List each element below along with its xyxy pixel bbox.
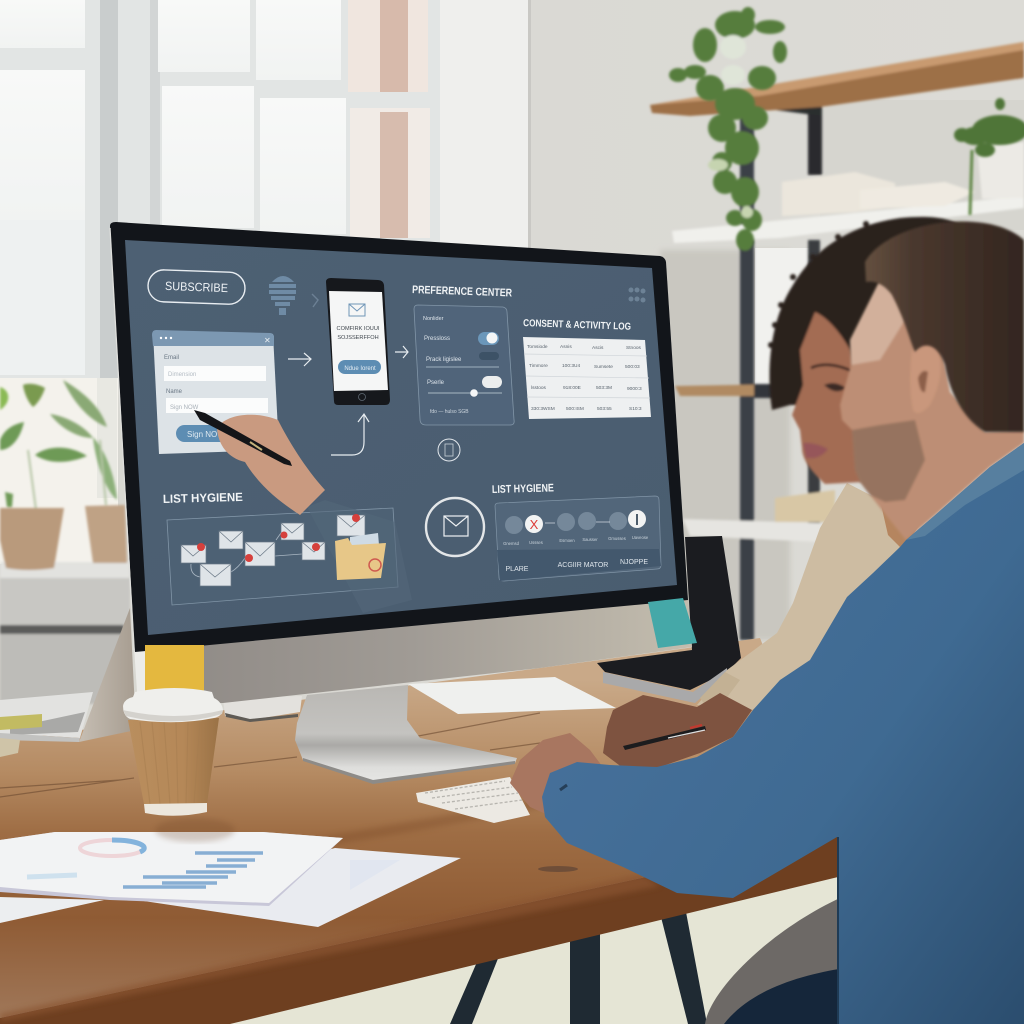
- panel: list hygiene status flow: X: [530, 517, 539, 532]
- screen: sign-up form: Dimension: [168, 372, 196, 378]
- table: activity log: Tomsiode: [527, 344, 548, 350]
- coffee cup: [123, 688, 235, 842]
- panel: list hygiene status flow: Uaveose: [632, 535, 649, 540]
- chair and trousers: [705, 897, 850, 1024]
- table: activity log: Sumsete: [594, 364, 613, 370]
- panel: list hygiene status flow: Sausser: [582, 537, 598, 542]
- table: activity log: 918:00E: [563, 385, 581, 391]
- man: neck and head: [840, 280, 1024, 540]
- hanging plant: [669, 7, 787, 251]
- table: activity log: Stnoos: [626, 345, 642, 351]
- screen: subscribe button: SUBSCRIBE: [165, 279, 228, 295]
- wooden desk: [0, 638, 838, 1018]
- table: activity log: 500:ISM: [566, 406, 584, 412]
- screen: sign-up form: Sign NOW: [170, 405, 199, 411]
- woman: hand with pen: [603, 693, 752, 768]
- table: activity log: S10:3: [629, 406, 642, 412]
- panel: list hygiene status flow: Gnemsd: [503, 541, 520, 546]
- screen: sign-up form: ✕: [264, 336, 271, 345]
- icon: striped bulb: [269, 276, 296, 315]
- screen: subscribe button: [147, 269, 246, 305]
- keyboard: [416, 777, 530, 823]
- potted plants on window sill: [0, 380, 130, 704]
- panel: preference center toggles: [414, 305, 514, 425]
- icon: large envelope circle: [426, 498, 484, 556]
- panel: list hygiene status flow: Ussses: [529, 540, 543, 545]
- laptop at left edge: [0, 608, 136, 757]
- heading: preference center: PREFERENCE CENTER: [412, 284, 512, 299]
- table: activity log: Ascis: [592, 345, 604, 351]
- panel: list hygiene status flow: [495, 496, 661, 581]
- panel: preference center toggles: Nonlider: [423, 316, 444, 322]
- panel: preference center toggles: Pserle: [427, 380, 445, 386]
- man: blue shirt: [542, 443, 1024, 1024]
- heading: consent and activity log: CONSENT & ACTIVITY LOG: [523, 318, 631, 333]
- arrow: faint chevron: [312, 294, 318, 307]
- arrow: form to phone: [288, 353, 311, 366]
- table: activity log: [523, 337, 651, 419]
- woman: sweater and chest: [697, 483, 923, 712]
- sticky note yellow: [145, 645, 204, 695]
- panel: list hygiene status flow: PLARE: [506, 566, 529, 573]
- laptop behind monitor: [597, 536, 741, 703]
- woman: hair and face: [768, 217, 958, 484]
- man: hair: [865, 221, 1024, 432]
- panel: list hygiene status flow: Esmoen: [559, 538, 575, 543]
- table: activity log: 9000:3: [627, 386, 642, 392]
- list hygiene envelopes and folder: [181, 514, 386, 586]
- table: activity log: 500:03: [625, 364, 640, 370]
- screen: sign-up form: Name: [166, 389, 183, 395]
- screen: sign-up form: Email: [164, 355, 179, 361]
- screen: sign-up form: [152, 330, 279, 454]
- desk legs and floor: [0, 835, 838, 1024]
- screen: phone confirmation: [326, 278, 390, 405]
- sticky note teal: [648, 598, 697, 648]
- table: activity log: 100:3U4: [562, 363, 580, 369]
- potted plant on shelf: [954, 98, 1024, 215]
- screen: sign-up form: Sign NOW: [187, 430, 225, 439]
- table: activity log: 330:3WSM: [531, 406, 555, 412]
- monitor body: [110, 222, 692, 706]
- panel: list hygiene status flow: ACGIIR MATOR: [558, 562, 608, 569]
- screen: phone confirmation: SOJSSERFFOH: [337, 335, 379, 341]
- table: activity log: lsstoos: [531, 385, 547, 391]
- panel: list hygiene status flow: Gmusses: [608, 536, 626, 541]
- table: activity log: 503:55: [597, 406, 612, 412]
- panel: preference center toggles: fdo — hulso SGB: [430, 409, 469, 415]
- table: activity log: Asnis: [560, 344, 572, 350]
- window with panes: [0, 0, 440, 564]
- table: activity log: 503:3M: [596, 385, 612, 391]
- heading: list hygiene left: LIST HYGIENE: [163, 490, 243, 506]
- on-screen sleeve and hand with pen: [194, 410, 412, 613]
- arrow: phone to preference center: [395, 346, 408, 358]
- arrow: curved up to phone: [331, 414, 369, 455]
- icon: document badge: [438, 439, 460, 461]
- panel: list hygiene envelopes: [167, 508, 398, 605]
- documents on desk: [0, 677, 616, 927]
- panel: list hygiene status flow: NJOPPE: [620, 559, 648, 566]
- monitor stand: [295, 685, 517, 784]
- icon: grid dots: [628, 288, 646, 302]
- panel: preference center toggles: Pressloss: [424, 336, 450, 342]
- screen: phone confirmation: Ndue Iorent: [344, 366, 376, 372]
- wall shelves with decor: [650, 42, 1024, 640]
- man: hand on keyboard: [510, 733, 605, 815]
- heading: list hygiene right: LIST HYGIENE: [492, 482, 554, 496]
- table: activity log: Timmore: [529, 363, 548, 369]
- panel: preference center toggles: Prack ligislee: [426, 357, 462, 363]
- screen: phone confirmation: COMFIRK IOUUI: [337, 326, 380, 332]
